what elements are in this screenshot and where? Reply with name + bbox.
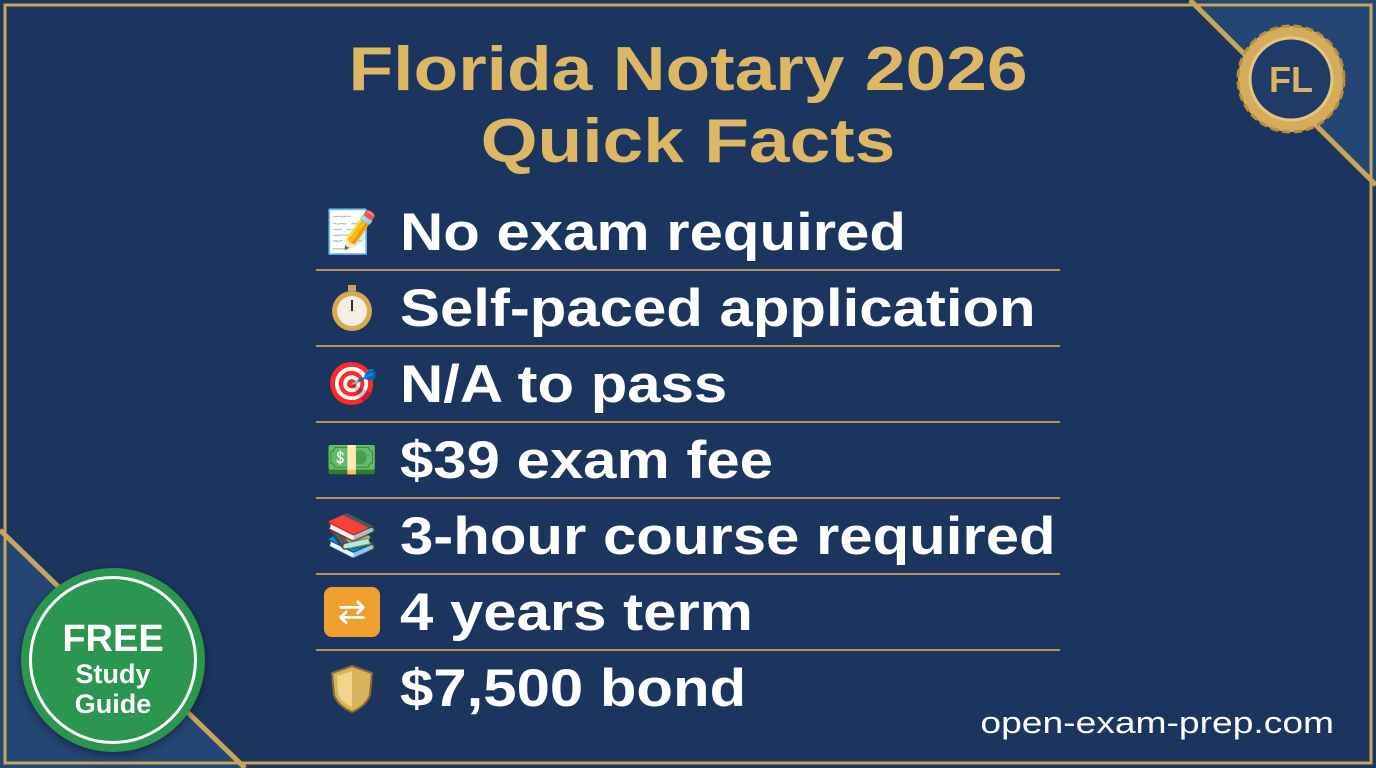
fact: course: 📚 [326, 511, 378, 560]
fact: no exam: No exam required [400, 203, 906, 262]
title: Quick Facts [481, 107, 895, 176]
fact: self-paced [316, 271, 1060, 347]
fact: bond: $7,500 bond [400, 659, 746, 718]
fact: term: 4 years term [400, 583, 753, 642]
fact: term: ⇄ [338, 592, 366, 632]
fact: fee [316, 423, 1060, 499]
fact: term [316, 575, 1060, 651]
fact: pass: N/A to pass [400, 355, 727, 414]
fact: fee: 💵 [326, 435, 378, 484]
fact: no exam [316, 195, 1060, 271]
title: Florida Notary 2026 [348, 35, 1028, 104]
fact: fee: $39 exam fee [400, 431, 773, 490]
fact: course [316, 499, 1060, 575]
fact: pass [316, 347, 1060, 423]
badge: free study guide [21, 568, 205, 752]
fact list [316, 203, 1060, 718]
fact: no exam: 📝 [326, 207, 378, 256]
fact: pass: 🎯 [326, 359, 378, 408]
badge: free study guide: Guide [75, 689, 151, 719]
badge: free study guide: Study [75, 659, 150, 689]
fact: self-paced: Self-paced application [400, 279, 1036, 338]
fact: course: 3-hour course required [400, 507, 1056, 566]
title [348, 35, 1028, 176]
badge: FL seal: FL [1269, 59, 1313, 100]
footer url: open-exam-prep.com [980, 705, 1334, 740]
badge: FL seal [1236, 24, 1346, 134]
badge: free study guide: FREE [62, 618, 164, 660]
